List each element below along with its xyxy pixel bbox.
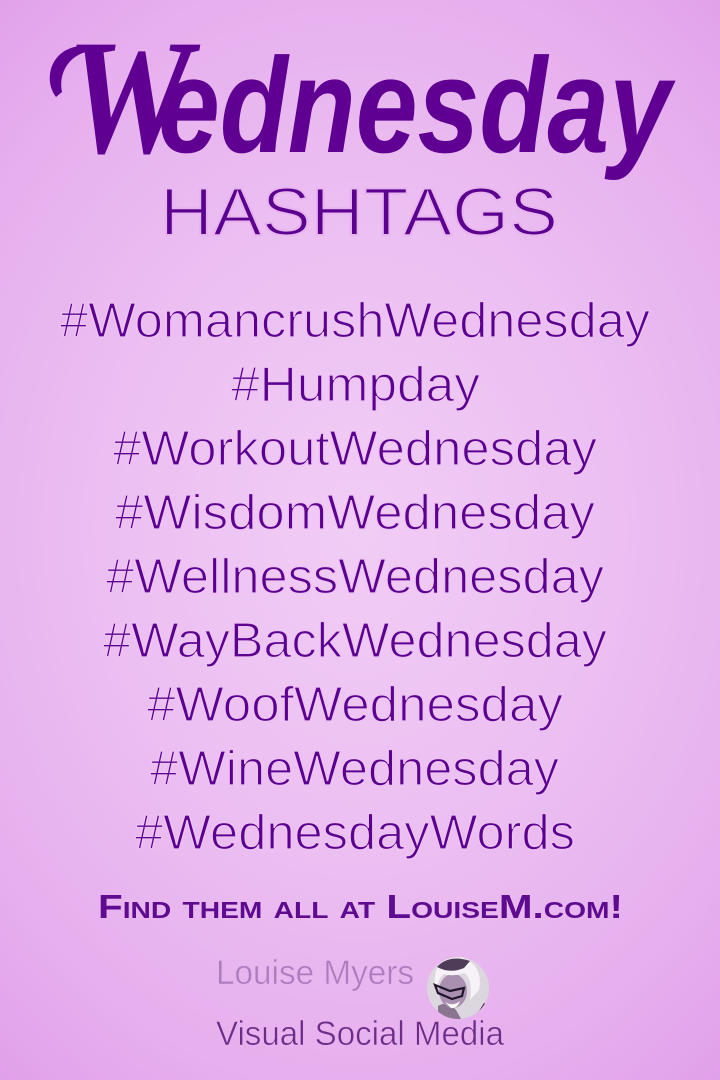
brand: Visual Social Media: Visual Social Media [216,1015,504,1053]
hashtag: WednesdayWords: #WednesdayWords [135,806,575,860]
title initial W: W [66,7,201,188]
hashtag: WoofWednesday: #WoofWednesday [147,678,564,732]
subtitle: HASHTAGS: HASHTAGS [160,174,558,250]
call to action: Find them all at LouiseM.com! [98,888,623,925]
icon: portrait photo [427,957,489,1019]
brand: Louise Myers: Louise Myers [216,954,414,992]
hashtag: WorkoutWednesday: #WorkoutWednesday [113,422,598,476]
title: Wednesday [50,7,676,188]
hashtag: WayBackWednesday: #WayBackWednesday [103,614,608,668]
hashtag: WomancrushWednesday: #WomancrushWednesday [60,294,651,348]
title swash [50,46,86,97]
hashtag: Humpday: #Humpday [231,358,481,412]
hashtag: WellnessWednesday: #WellnessWednesday [106,550,605,604]
hashtag: WineWednesday: #WineWednesday [150,742,560,796]
hashtag list [60,294,651,860]
hashtag: WisdomWednesday: #WisdomWednesday [115,486,596,540]
